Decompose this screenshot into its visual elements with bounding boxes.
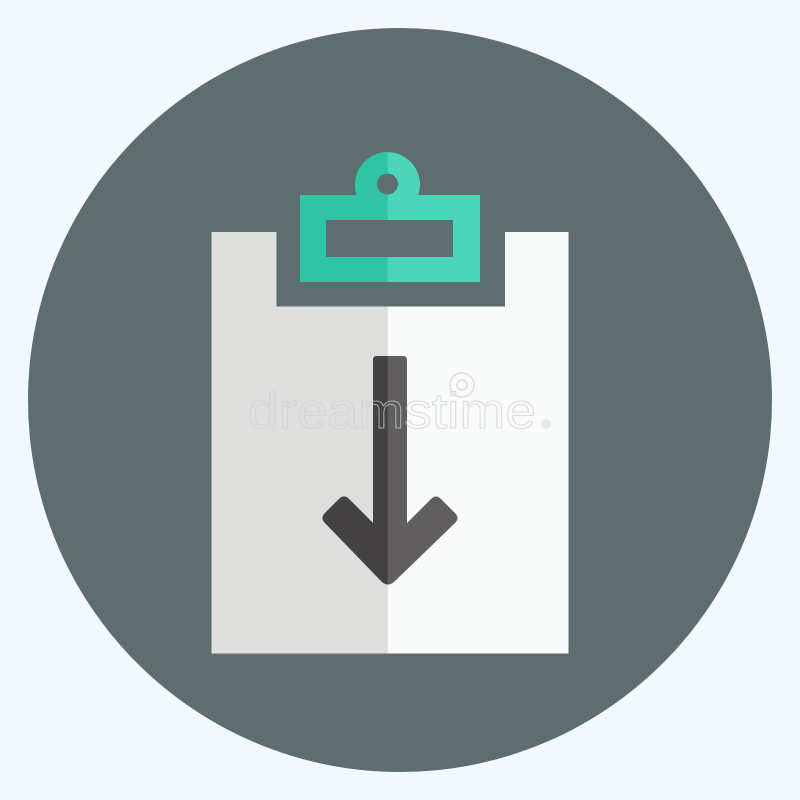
clip: [300, 152, 480, 282]
paper sheet: [212, 232, 568, 654]
watermark text: dreamstime: [248, 383, 536, 439]
down arrow: [322, 356, 458, 584]
